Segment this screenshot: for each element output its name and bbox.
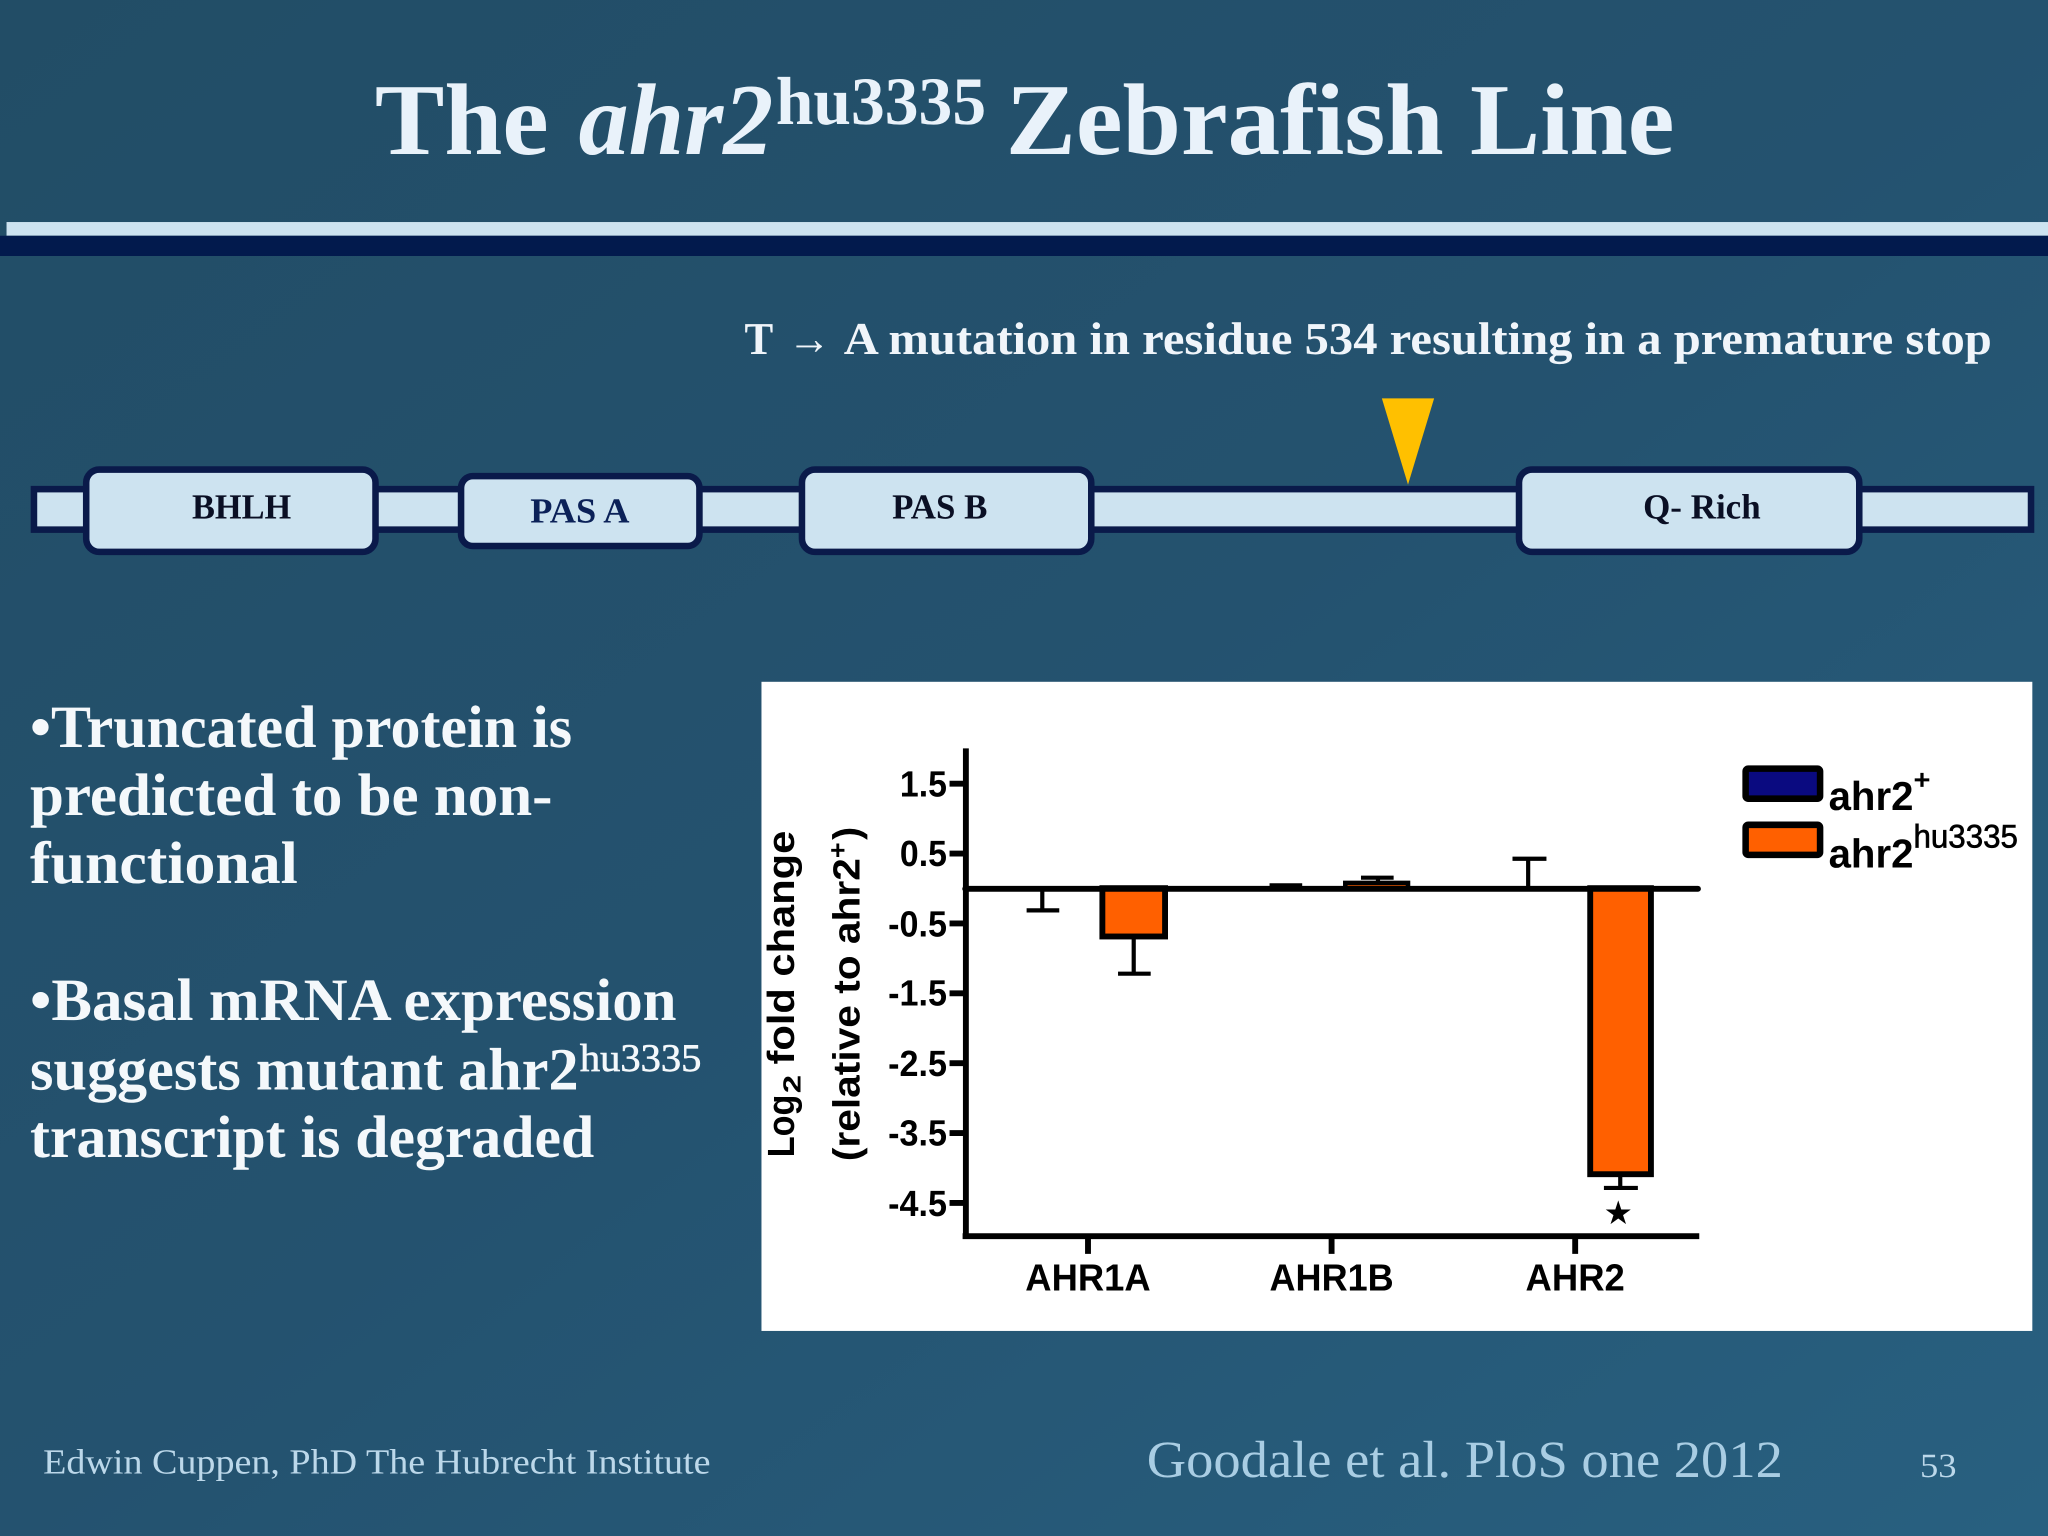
title: hu3335 bbox=[776, 65, 986, 140]
legend item: ahr2+: ahr2 bbox=[1829, 773, 1913, 819]
mutation caption: T bbox=[744, 313, 773, 364]
title: Zebrafish Line bbox=[1006, 63, 1674, 176]
y axis ticks and labels: -4.5 bbox=[888, 1183, 947, 1224]
chart background bbox=[761, 682, 2032, 1331]
legend item: ahr2hu3335: ahr2 bbox=[1829, 831, 1913, 876]
y axis title: Log bbox=[761, 1095, 803, 1157]
bullet: basal mRNA expression bbox=[30, 967, 701, 1172]
bullet: basal mRNA expression: hu3335 bbox=[580, 1037, 701, 1080]
domain: PAS B bbox=[802, 470, 1091, 552]
bullet: basal mRNA expression: transcript is degraded bbox=[30, 1104, 595, 1172]
y axis title bbox=[761, 827, 869, 1161]
bullet: truncated protein bbox=[30, 694, 572, 896]
bars: AHR1B bbox=[1270, 878, 1408, 889]
bars: AHR1A bbox=[1027, 888, 1165, 974]
footer: slide number: 53 bbox=[1920, 1447, 1957, 1485]
title: The bbox=[375, 63, 549, 176]
x axis ticks and labels: AHR2 bbox=[1526, 1258, 1625, 1300]
legend item: ahr2+ bbox=[1746, 765, 1930, 819]
y axis title: ) bbox=[827, 827, 869, 840]
mutation caption: A mutation in residue 534 resulting in a premature stop bbox=[844, 313, 1992, 364]
x axis ticks and labels: AHR1A bbox=[1025, 1258, 1151, 1300]
x axis ticks and labels bbox=[963, 1236, 1699, 1300]
legend item: ahr2+: + bbox=[1913, 765, 1930, 795]
mutation caption: → bbox=[788, 313, 831, 364]
footer: presenter credit: Edwin Cuppen, PhD The Hubrecht Institute bbox=[43, 1442, 711, 1481]
y axis ticks and labels: 0.5 bbox=[900, 833, 947, 874]
panel: bar chart bbox=[761, 682, 2032, 1331]
domain: PAS A bbox=[461, 476, 699, 546]
bullet: truncated protein: functional bbox=[30, 829, 298, 896]
y axis ticks and labels bbox=[888, 748, 966, 1238]
legend bbox=[1746, 765, 2018, 876]
domain: BHLH bbox=[86, 470, 376, 552]
domain: Q-Rich bbox=[1519, 470, 1859, 552]
bullet: basal mRNA expression: •Basal mRNA expression bbox=[30, 967, 677, 1033]
domain: Q-Rich: Q- Rich bbox=[1643, 487, 1761, 526]
bullet text bbox=[30, 694, 701, 1172]
title divider band bbox=[0, 222, 2048, 256]
title bbox=[375, 63, 1674, 176]
bars: AHR2 bbox=[1512, 859, 1651, 1232]
y axis title: + bbox=[824, 842, 853, 858]
y axis title: 2 bbox=[780, 1075, 807, 1093]
y axis ticks and labels: -0.5 bbox=[888, 904, 947, 944]
protein domain diagram bbox=[34, 398, 2031, 552]
y axis ticks and labels: -1.5 bbox=[888, 973, 947, 1014]
domain: BHLH: BHLH bbox=[192, 487, 291, 526]
y axis ticks and labels: -3.5 bbox=[888, 1113, 947, 1153]
x axis ticks and labels: AHR1B bbox=[1270, 1258, 1394, 1300]
bullet: truncated protein: •Truncated protein is bbox=[30, 694, 572, 760]
title: ahr2 bbox=[579, 63, 773, 176]
y axis title: fold change bbox=[761, 831, 803, 1064]
domain: PAS B: PAS B bbox=[892, 487, 987, 526]
icon: significance star: ★ bbox=[1604, 1194, 1633, 1232]
footer: citation: Goodale et al. PloS one 2012 bbox=[1147, 1430, 1783, 1489]
domain: PAS A: PAS A bbox=[530, 491, 630, 530]
zero baseline bbox=[965, 887, 1698, 891]
y axis title: (relative to ahr2 bbox=[827, 858, 869, 1161]
y axis ticks and labels: 1.5 bbox=[900, 764, 947, 805]
icon: mutation marker triangle bbox=[1382, 398, 1434, 485]
legend item: ahr2hu3335 bbox=[1746, 819, 2018, 876]
bullet: basal mRNA expression: suggests mutant ahr2 bbox=[30, 1036, 579, 1104]
legend item: ahr2hu3335: hu3335 bbox=[1913, 819, 2018, 856]
protein backbone bar bbox=[34, 489, 2031, 530]
y axis ticks and labels: -2.5 bbox=[888, 1044, 947, 1084]
bullet: truncated protein: predicted to be non- bbox=[30, 761, 552, 828]
